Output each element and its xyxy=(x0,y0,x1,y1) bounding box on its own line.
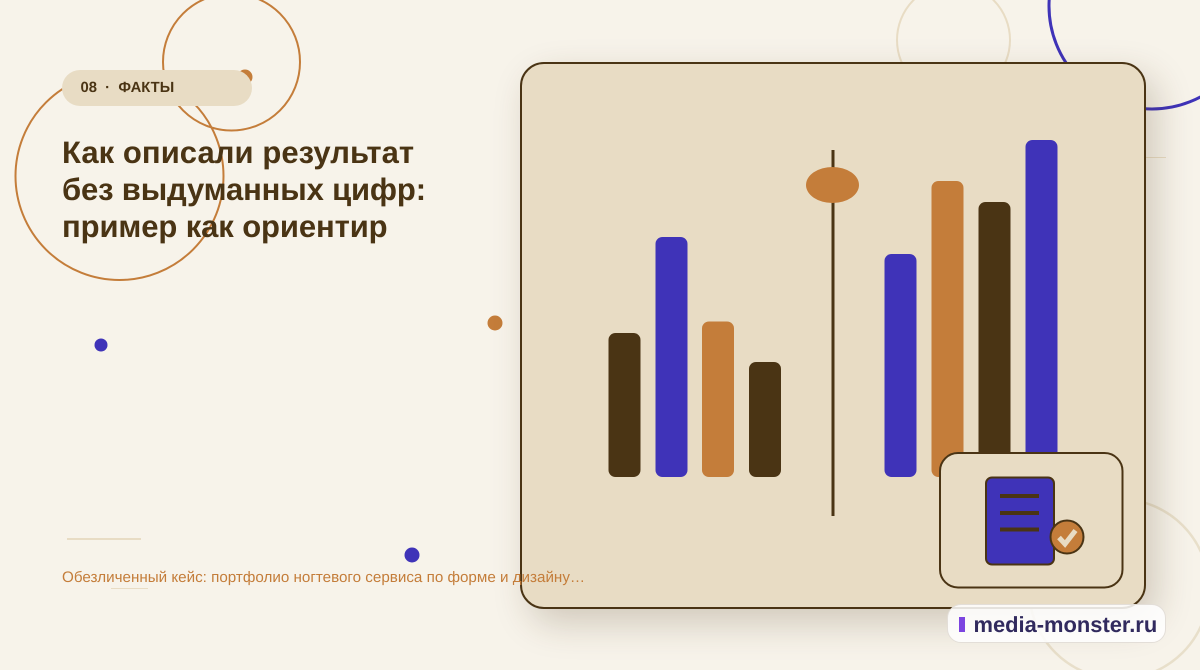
title: без выдуманных цифр: xyxy=(62,172,426,206)
title: Как описали результат xyxy=(62,134,414,170)
title xyxy=(62,134,426,244)
watermark xyxy=(946,604,1166,642)
watermark text: media-monster.ru xyxy=(974,612,1157,637)
title: пример как ориентир xyxy=(62,208,388,244)
watermark accent bar xyxy=(958,616,964,632)
tag text: 08 · ФАКТЫ xyxy=(80,80,174,96)
tag pill xyxy=(62,70,252,106)
illustration panel: bar chart card xyxy=(520,62,1146,609)
footnote text: Обезличенный кейс: портфолио ногтевого сервиса по форме и дизайну… xyxy=(62,569,585,586)
